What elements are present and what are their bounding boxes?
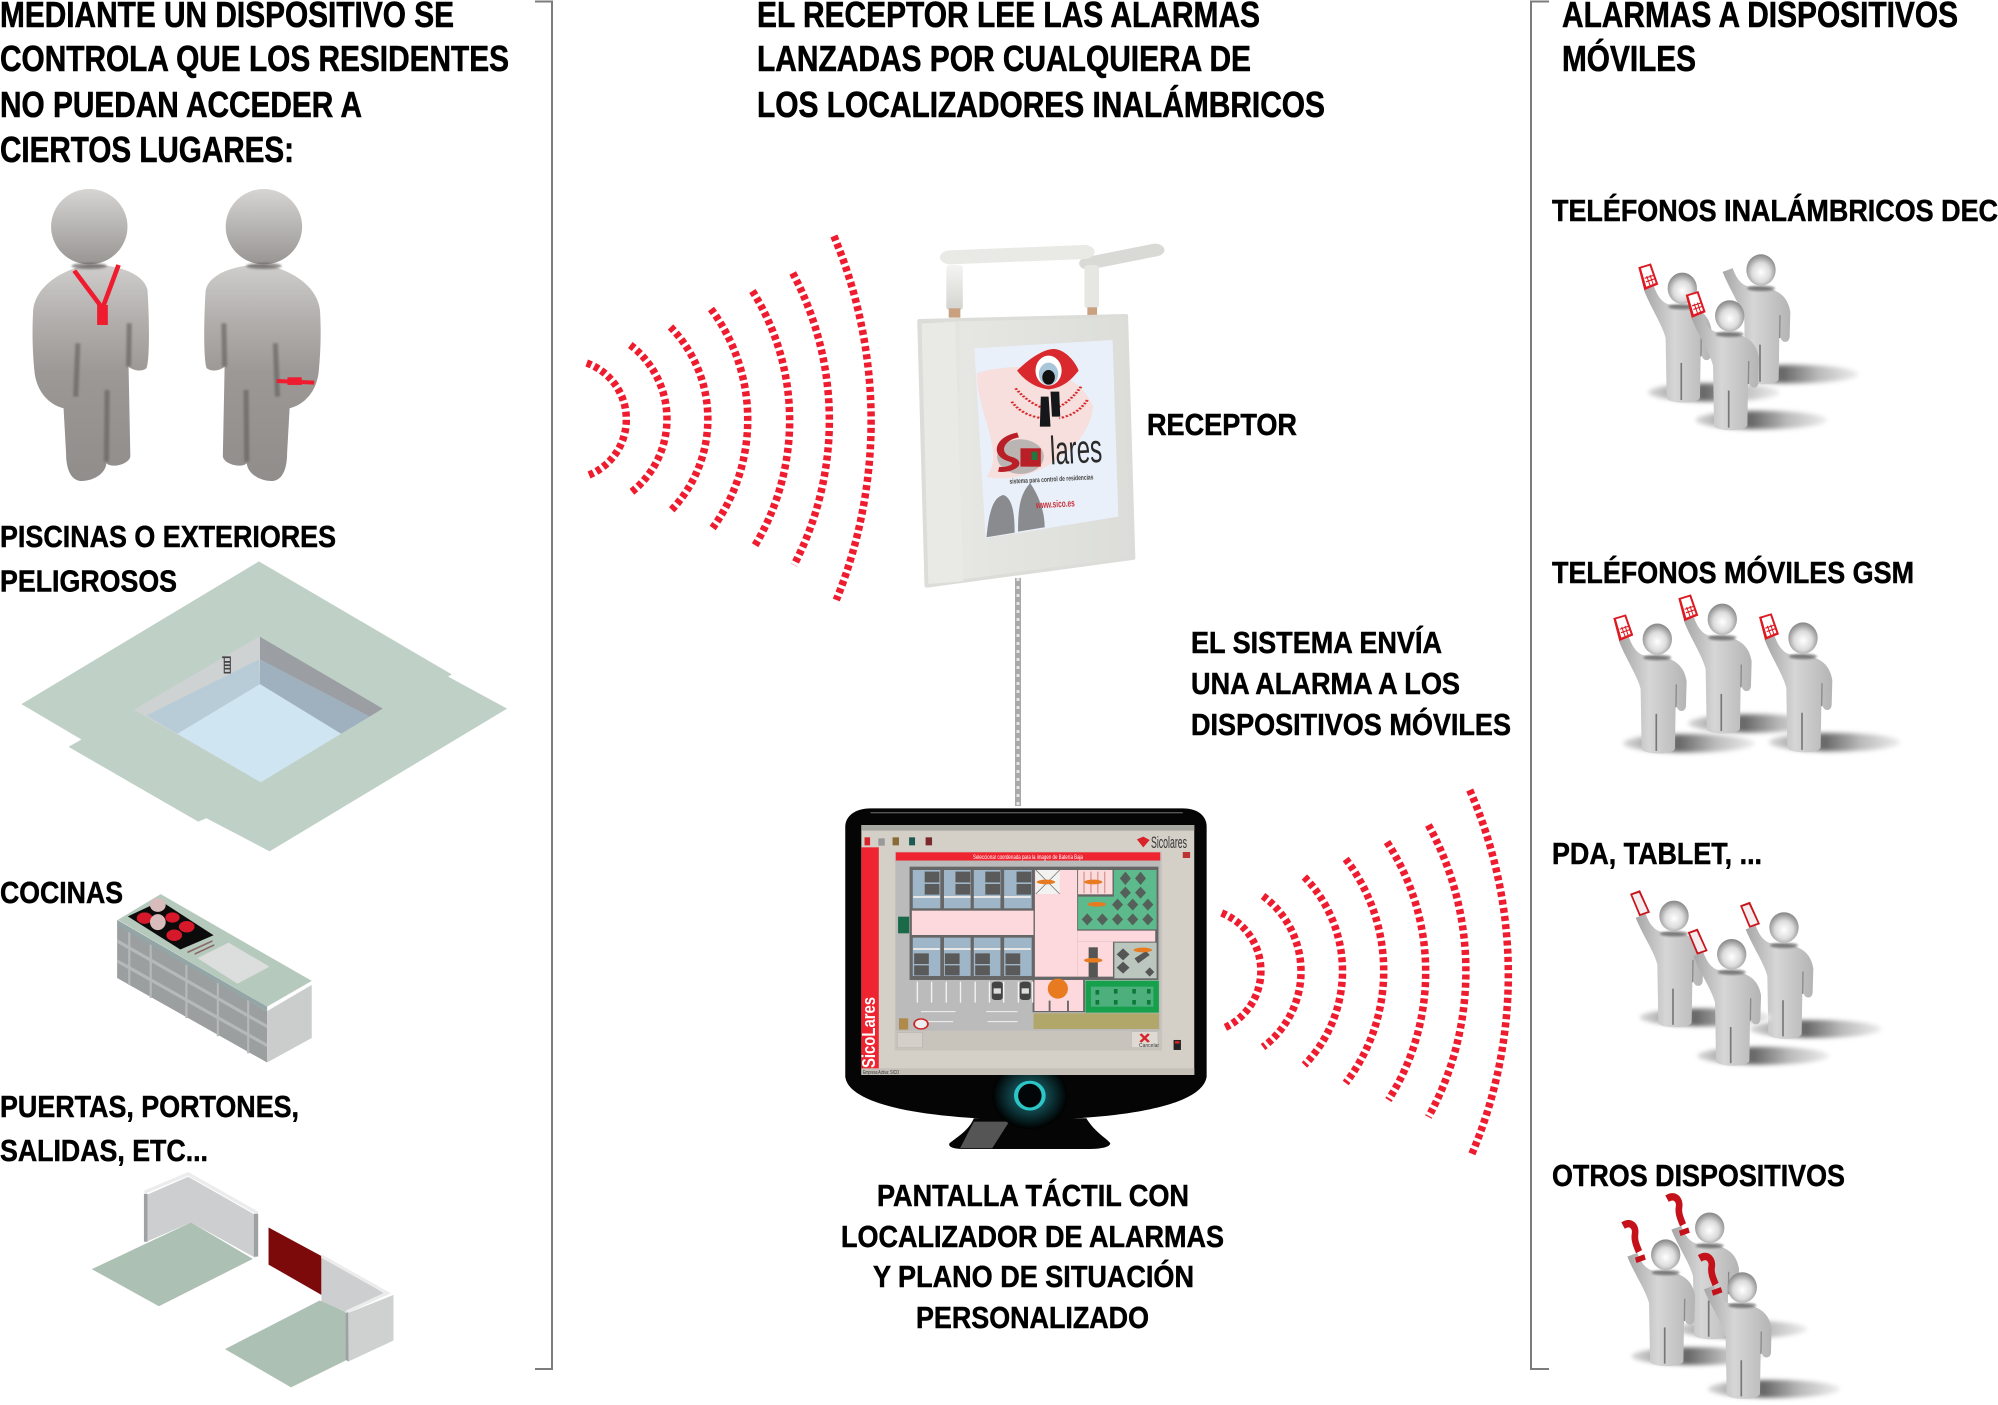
antennas [946, 250, 1155, 318]
text inside monitor screen: SicoLares [859, 997, 879, 1068]
right column bracket divider [1531, 2, 1549, 1369]
figures holding tablets [1630, 890, 1882, 1066]
caption: touch screen: PANTALLA TÁCTIL CON [877, 1178, 1189, 1213]
monitor bezel [845, 808, 1207, 1120]
text: system sends alarm: DISPOSITIVOS MÓVILES [1191, 706, 1511, 742]
text: system sends alarm [1191, 625, 1511, 742]
figures with question marks [1623, 1197, 1840, 1399]
touch-screen monitor [845, 808, 1207, 1149]
label: GSM phones: TELÉFONOS MÓVILES GSM [1552, 554, 1914, 590]
screen: floor plan application [861, 825, 1194, 1075]
label: pools: PELIGROSOS [0, 564, 177, 598]
logo text on receiver label: lares [1049, 427, 1103, 474]
heading: left column intro: CONTROLA QUE LOS RESIDENTES [0, 38, 509, 79]
receiver label: Sicolares logo panel [974, 340, 1118, 538]
logo text on receiver label [1007, 427, 1105, 513]
logo text on receiver label: sistema para control de residencias [1009, 474, 1094, 486]
label: pools [0, 519, 336, 598]
text inside monitor screen: Sicolares [1151, 833, 1187, 852]
label: doors: PUERTAS, PORTONES, [0, 1089, 299, 1124]
heading: right column [1562, 0, 1958, 79]
heading: center column [757, 0, 1325, 125]
text inside monitor screen: Seleccionar coordenada para la imagen de Batería Baja [973, 855, 1083, 861]
text: system sends alarm: EL SISTEMA ENVÍA [1191, 625, 1442, 660]
caption: touch screen: Y PLANO DE SITUACIÓN [873, 1258, 1194, 1294]
wireless waves toward receiver [587, 236, 871, 600]
label: receptor: RECEPTOR [1147, 407, 1297, 442]
heading: center column: LANZADAS POR CUALQUIERA DE [757, 38, 1251, 79]
heading: left column intro [0, 0, 509, 170]
cable between receiver and screen [1015, 578, 1021, 806]
label: kitchens: COCINAS [0, 875, 123, 910]
logo text on receiver label: www.sico.es [1035, 498, 1075, 511]
monitor stand [949, 1118, 1110, 1149]
illustration: isometric kitchen counter [117, 894, 312, 1063]
illustration: two residents with lanyard and wristband [33, 189, 321, 481]
left column bracket divider [535, 2, 552, 1369]
label: pools: PISCINAS O EXTERIORES [0, 519, 336, 554]
label: doors [0, 1089, 299, 1168]
caption: touch screen [841, 1178, 1224, 1335]
receiver device with antennas [920, 250, 1155, 586]
illustration: isometric pool [21, 561, 507, 851]
text inside monitor screen [859, 833, 1187, 1076]
text inside monitor screen: Empresa Activa: SICO [863, 1070, 899, 1076]
heading: left column intro: NO PUEDAN ACCEDER A [0, 84, 362, 125]
heading: left column intro: CIERTOS LUGARES: [0, 129, 294, 170]
text inside monitor screen: Cancelar [1139, 1043, 1159, 1049]
caption: touch screen: LOCALIZADOR DE ALARMAS [841, 1219, 1224, 1254]
illustration: isometric walls and door [92, 1174, 394, 1387]
label: other devices: OTROS DISPOSITIVOS [1552, 1158, 1845, 1193]
label: PDA and tablet: PDA, TABLET, ... [1552, 836, 1762, 871]
heading: right column: MÓVILES [1562, 37, 1696, 79]
heading: center column: LOS LOCALIZADORES INALÁMBRICOS [757, 84, 1325, 125]
wireless waves from monitor to mobile devices [1222, 790, 1508, 1156]
caption: touch screen: PERSONALIZADO [916, 1300, 1149, 1335]
text: system sends alarm: UNA ALARMA A LOS [1191, 666, 1460, 701]
label: doors: SALIDAS, ETC... [0, 1133, 208, 1168]
figures holding DECT phones [1638, 254, 1859, 430]
power button ring [992, 1062, 1068, 1129]
figures holding GSM phones [1613, 594, 1901, 753]
